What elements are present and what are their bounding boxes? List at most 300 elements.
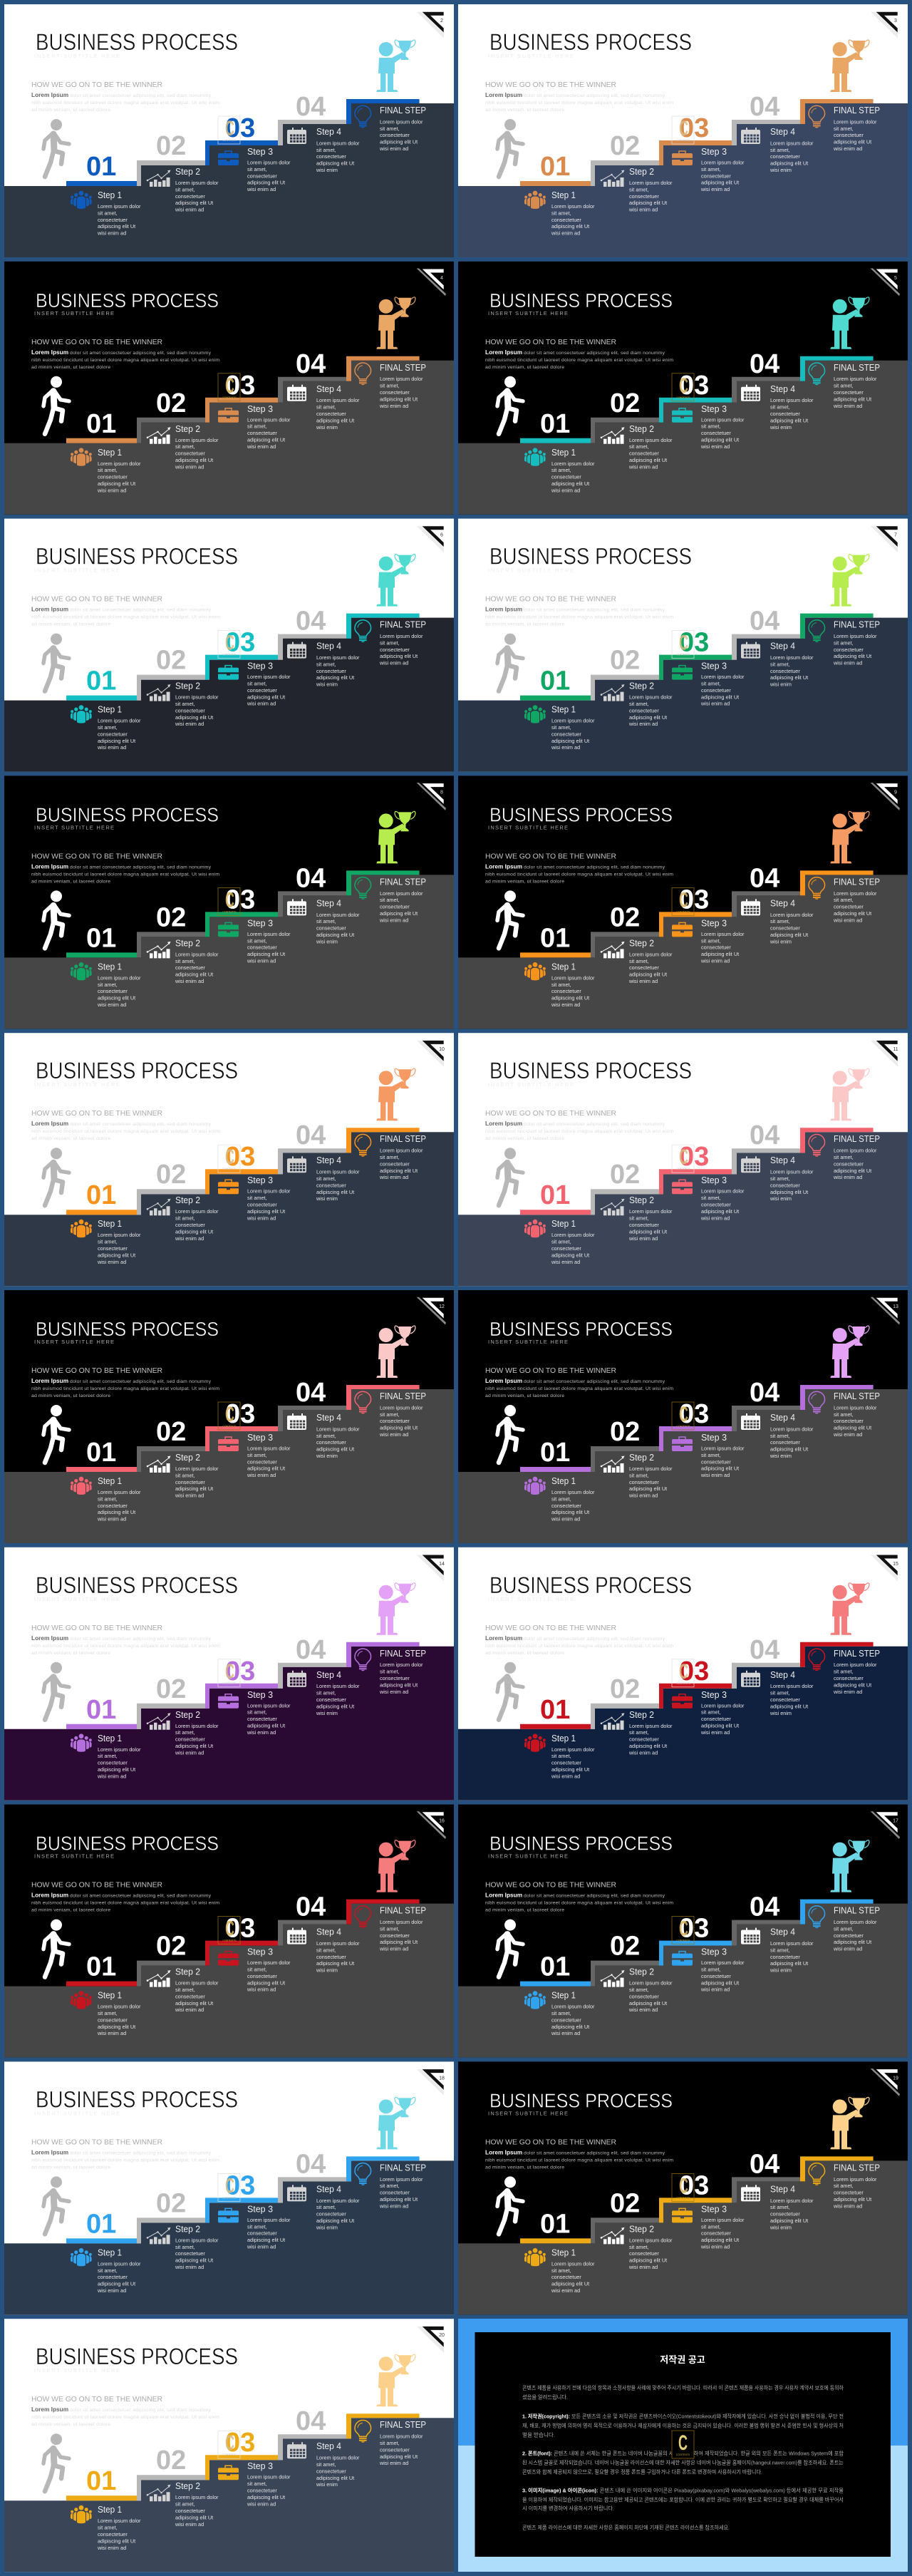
number 04: 04 bbox=[750, 607, 779, 637]
step 1 text: sit amet, bbox=[551, 724, 571, 731]
number 04: 04 bbox=[296, 1378, 326, 1408]
step 3 bbox=[672, 2203, 745, 2250]
step 1 text: consectetuer bbox=[551, 2016, 581, 2023]
final step text: Lorem ipsum dolor bbox=[380, 118, 423, 125]
subtitle: INSERT SUBTITLE HERE bbox=[34, 567, 120, 574]
walking figure bbox=[43, 2433, 69, 2491]
final step text: sit amet, bbox=[380, 1669, 400, 1675]
final step label: FINAL STEP bbox=[380, 1648, 426, 1659]
step 3 text: consectetuer bbox=[247, 1201, 277, 1207]
page number: 3 bbox=[894, 19, 897, 24]
trophy figure bbox=[831, 1840, 869, 1892]
final step bbox=[355, 1133, 426, 1180]
subtitle: INSERT SUBTITLE HERE bbox=[488, 2110, 568, 2116]
step 2 bbox=[147, 2480, 219, 2528]
icon: team bbox=[524, 962, 546, 980]
step 1 label: Step 1 bbox=[551, 1990, 576, 2001]
final step text: wisi enim ad bbox=[833, 2203, 862, 2209]
intro paragraph: Lorem Ipsum bbox=[485, 2148, 522, 2155]
corner wedge bbox=[871, 1297, 900, 1324]
step 4 text: sit amet, bbox=[316, 661, 336, 667]
final step text: consectetuer bbox=[834, 132, 864, 138]
step 1 bbox=[71, 2504, 141, 2551]
trophy figure bbox=[376, 1068, 415, 1120]
step 3 label: Step 3 bbox=[701, 146, 727, 157]
step 2 label: Step 2 bbox=[629, 1452, 654, 1463]
step 3 bbox=[672, 146, 745, 192]
step 3 text: consectetuer bbox=[247, 687, 277, 694]
step 3 text: wisi enim ad bbox=[247, 1472, 276, 1478]
slide 13: purple on black bbox=[458, 1290, 908, 1543]
final step text: Lorem ipsum dolor bbox=[834, 2176, 876, 2183]
heading: HOW WE GO ON TO BE THE WINNER bbox=[31, 339, 162, 346]
icon: chart bbox=[147, 942, 171, 958]
step 4 label: Step 4 bbox=[770, 1412, 795, 1423]
notice intro bbox=[522, 2384, 844, 2401]
step 1 text: adipiscing elit Ut bbox=[98, 480, 135, 487]
step 2 bbox=[601, 166, 673, 213]
intro paragraph: ad minim veniam, ut laoreet dolore bbox=[31, 879, 110, 884]
step 2 text: adipiscing elit Ut bbox=[175, 1485, 213, 1492]
step 3 label: Step 3 bbox=[701, 403, 727, 414]
intro paragraph: dolor sit amet consectetuer adipiscing elit, sed diam nonummy bbox=[524, 93, 665, 98]
notice title: 저작권 공고 bbox=[660, 2354, 705, 2365]
step 4 text: consectetuer bbox=[316, 1182, 346, 1188]
lower stair block bbox=[4, 875, 454, 1029]
intro paragraph bbox=[31, 1634, 219, 1656]
final step text: Lorem ipsum dolor bbox=[834, 890, 876, 897]
step 2 text: adipiscing elit Ut bbox=[175, 2514, 213, 2520]
step 1 text: consectetuer bbox=[551, 1760, 581, 1766]
step 3 text: adipiscing elit Ut bbox=[701, 1208, 739, 1215]
icon: chart bbox=[601, 2227, 624, 2244]
page number: 9 bbox=[894, 790, 897, 795]
title: BUSINESS PROCESS bbox=[36, 289, 219, 311]
step 3 label: Step 3 bbox=[701, 1947, 727, 1957]
step 4 text: Lorem ipsum dolor bbox=[316, 1426, 359, 1432]
step 2 text: wisi enim ad bbox=[628, 207, 658, 213]
step 2 bbox=[147, 1709, 219, 1756]
lower stair block bbox=[4, 103, 454, 257]
step 4 label: Step 4 bbox=[316, 1155, 341, 1165]
corner wedge bbox=[417, 1555, 444, 1581]
step 2 bbox=[601, 1967, 673, 2013]
watermark badge: C bbox=[225, 2174, 234, 2198]
step 3 text: sit amet, bbox=[701, 680, 721, 686]
step 3 text: consectetuer bbox=[701, 430, 731, 436]
step 4 bbox=[287, 1669, 360, 1716]
icon: bulb bbox=[355, 1391, 371, 1414]
step 4 text: consectetuer bbox=[316, 1954, 346, 1960]
final step text: sit amet, bbox=[834, 383, 854, 389]
step 4 text: wisi enim bbox=[770, 938, 792, 944]
grey stair treads bbox=[137, 1148, 346, 1215]
step 4 text: adipiscing elit Ut bbox=[316, 2217, 354, 2224]
intro paragraph: dolor sit amet consectetuer adipiscing elit, sed diam nonummy bbox=[524, 2150, 665, 2155]
intro paragraph bbox=[485, 1892, 673, 1913]
step 3 text: Lorem ipsum dolor bbox=[701, 2217, 744, 2223]
watermark badge bbox=[218, 2431, 240, 2458]
step 2 label: Step 2 bbox=[629, 2223, 654, 2234]
intro paragraph bbox=[31, 349, 219, 370]
step 2 text: Lorem ipsum dolor bbox=[629, 694, 672, 701]
slide background bbox=[458, 2061, 908, 2314]
step 3 text: sit amet, bbox=[247, 1195, 267, 1201]
intro paragraph: dolor sit amet consectetuer adipiscing elit, sed diam nonummy bbox=[70, 93, 212, 98]
slide background bbox=[4, 776, 454, 1029]
step 1 text: consectetuer bbox=[98, 474, 128, 480]
step 1 text: sit amet, bbox=[98, 467, 118, 473]
step 3 text: sit amet, bbox=[701, 1452, 721, 1458]
step 2 text: wisi enim ad bbox=[175, 721, 204, 727]
step 4 bbox=[287, 1412, 360, 1459]
lower stair block bbox=[458, 1647, 908, 1800]
icon: team bbox=[71, 2248, 92, 2266]
final step text: wisi enim ad bbox=[379, 145, 408, 152]
intro paragraph: ad minim veniam, ut laoreet dolore bbox=[31, 1651, 110, 1656]
step 3 text: wisi enim ad bbox=[700, 1215, 730, 1221]
icon: calendar bbox=[287, 642, 306, 659]
intro paragraph: dolor sit amet consectetuer adipiscing elit, sed diam nonummy bbox=[524, 865, 665, 870]
step 2 text: adipiscing elit Ut bbox=[629, 2000, 667, 2006]
step 4 text: sit amet, bbox=[770, 2204, 790, 2210]
title: BUSINESS PROCESS bbox=[36, 2344, 238, 2369]
final step text: consectetuer bbox=[380, 2446, 410, 2453]
watermark badge bbox=[218, 1402, 240, 1430]
step 4 label: Step 4 bbox=[770, 1669, 795, 1680]
step 4 text: Lorem ipsum dolor bbox=[770, 397, 813, 403]
step 2 text: consectetuer bbox=[629, 450, 659, 457]
step 1 label: Step 1 bbox=[98, 1733, 122, 1743]
lower stair block bbox=[458, 1389, 908, 1543]
number 01: 01 bbox=[540, 1695, 570, 1725]
step 3 text: wisi enim ad bbox=[247, 1987, 276, 1993]
step 2 bbox=[601, 1195, 673, 1242]
final step label: FINAL STEP bbox=[380, 1905, 426, 1916]
step 2 text: Lorem ipsum dolor bbox=[175, 1980, 218, 1987]
icon: team bbox=[524, 1220, 546, 1237]
step 4 text: consectetuer bbox=[770, 668, 800, 674]
step 4 text: wisi enim bbox=[316, 1453, 338, 1459]
step 1 text: adipiscing elit Ut bbox=[551, 223, 589, 230]
icon: team bbox=[71, 1477, 92, 1495]
icon: bulb bbox=[355, 877, 371, 900]
icon: bulb bbox=[809, 877, 825, 900]
subtitle: INSERT SUBTITLE HERE bbox=[34, 2367, 120, 2374]
lower stair block bbox=[458, 618, 908, 772]
step 3 bbox=[672, 403, 745, 450]
final step text: adipiscing elit Ut bbox=[834, 396, 871, 402]
slide background bbox=[458, 1805, 908, 2058]
final step label: FINAL STEP bbox=[834, 1133, 880, 1144]
corner mark bbox=[876, 1041, 898, 1061]
corner mark bbox=[423, 269, 444, 289]
final step label: FINAL STEP bbox=[834, 105, 880, 115]
number 01: 01 bbox=[86, 2209, 116, 2239]
step 3 text: consectetuer bbox=[247, 944, 277, 951]
step 1 text: wisi enim ad bbox=[97, 2287, 126, 2294]
step 2 text: adipiscing elit Ut bbox=[629, 714, 667, 721]
step 2 label: Step 2 bbox=[175, 2480, 200, 2491]
final step bbox=[809, 1391, 880, 1438]
number 04: 04 bbox=[296, 1635, 326, 1665]
step 1 label: Step 1 bbox=[98, 1475, 122, 1486]
icon: briefcase bbox=[672, 1694, 693, 1709]
icon: briefcase bbox=[672, 408, 693, 423]
step 1 text: consectetuer bbox=[98, 1245, 128, 1252]
number 02: 02 bbox=[610, 1417, 640, 1447]
corner mark bbox=[423, 783, 444, 804]
grey stair treads bbox=[591, 1920, 800, 1987]
number 04: 04 bbox=[750, 349, 779, 379]
step 4 label: Step 4 bbox=[316, 897, 341, 908]
step 3 text: consectetuer bbox=[701, 1716, 731, 1722]
step 3 label: Step 3 bbox=[701, 661, 727, 671]
watermark badge: CONTENTS bbox=[676, 139, 690, 142]
step 4 bbox=[287, 126, 360, 173]
step 1 bbox=[524, 190, 595, 237]
icon: briefcase bbox=[218, 1694, 239, 1709]
notice footer: 콘텐츠 제품 라이선스에 대한 자세한 사항은 홈페이지 하단에 기재된 콘텐츠 라이선스를 참조하세요. bbox=[522, 2523, 730, 2530]
step 3 text: Lorem ipsum dolor bbox=[247, 931, 290, 937]
step 1 text: Lorem ipsum dolor bbox=[98, 1232, 140, 1238]
icon: team bbox=[524, 1477, 546, 1495]
final step text: Lorem ipsum dolor bbox=[380, 890, 423, 897]
step 3 text: Lorem ipsum dolor bbox=[701, 1702, 744, 1709]
step 2 label: Step 2 bbox=[629, 681, 654, 691]
watermark badge: C bbox=[679, 1403, 688, 1426]
step 3 text: Lorem ipsum dolor bbox=[701, 1188, 744, 1195]
step 2 bbox=[147, 681, 219, 727]
intro paragraph bbox=[485, 606, 673, 627]
step 2 text: sit amet, bbox=[175, 186, 195, 192]
intro paragraph: ad minim veniam, ut laoreet dolore bbox=[31, 2165, 110, 2170]
heading: HOW WE GO ON TO BE THE WINNER bbox=[485, 852, 616, 860]
step 2 label: Step 2 bbox=[629, 423, 654, 434]
step 1 text: Lorem ipsum dolor bbox=[98, 203, 140, 210]
final step text: sit amet, bbox=[834, 639, 854, 646]
step 3 label: Step 3 bbox=[701, 1175, 727, 1185]
step 4 text: adipiscing elit Ut bbox=[770, 417, 808, 423]
step 2 text: sit amet, bbox=[629, 186, 649, 192]
corner wedge bbox=[417, 2327, 444, 2353]
step 4 bbox=[741, 897, 814, 944]
watermark badge: C bbox=[225, 888, 234, 912]
step 3 text: wisi enim ad bbox=[700, 958, 730, 964]
step 1 text: consectetuer bbox=[98, 1503, 128, 1509]
icon: chart bbox=[601, 1713, 624, 1730]
trophy figure bbox=[831, 1583, 869, 1635]
number 02: 02 bbox=[610, 902, 640, 932]
watermark badge: CONTENTS bbox=[222, 139, 237, 142]
intro paragraph: nibh euismod tincidunt ut laoreet dolore magna aliquam erat volutpat. Ut wisi enim bbox=[485, 872, 673, 877]
step 1 text: sit amet, bbox=[551, 1753, 571, 1759]
step 4 text: Lorem ipsum dolor bbox=[316, 2455, 359, 2461]
number 03: 03 bbox=[225, 1142, 255, 1172]
step 2 text: sit amet, bbox=[175, 958, 195, 964]
step 4 text: adipiscing elit Ut bbox=[770, 2217, 808, 2224]
number 04: 04 bbox=[296, 1120, 326, 1150]
step 4 text: wisi enim bbox=[770, 424, 792, 431]
intro paragraph: nibh euismod tincidunt ut laoreet dolore magna aliquam erat volutpat. Ut wisi enim bbox=[31, 1901, 219, 1906]
title: BUSINESS PROCESS bbox=[489, 1572, 692, 1598]
intro paragraph: nibh euismod tincidunt ut laoreet dolore magna aliquam erat volutpat. Ut wisi enim bbox=[31, 1129, 219, 1134]
number 04: 04 bbox=[750, 1892, 779, 1922]
intro paragraph: dolor sit amet consectetuer adipiscing elit, sed diam nonummy bbox=[70, 351, 212, 356]
step 3 text: Lorem ipsum dolor bbox=[247, 2474, 290, 2480]
step 4 text: consectetuer bbox=[770, 1182, 800, 1188]
number 04: 04 bbox=[296, 92, 326, 122]
step 3 text: wisi enim ad bbox=[247, 443, 276, 450]
step 1 label: Step 1 bbox=[98, 704, 122, 715]
final step bbox=[355, 876, 426, 923]
title: BUSINESS PROCESS bbox=[36, 544, 238, 570]
slide background bbox=[4, 1805, 454, 2058]
watermark badge bbox=[218, 373, 240, 401]
step 4 bbox=[287, 2183, 360, 2230]
final step text: adipiscing elit Ut bbox=[380, 1939, 418, 1945]
accent stair treads bbox=[66, 1642, 420, 1729]
lower stair block bbox=[458, 2160, 908, 2314]
lower stair block bbox=[4, 1389, 454, 1543]
step 2 label: Step 2 bbox=[175, 2223, 200, 2234]
final step bbox=[809, 1905, 880, 1952]
step 1 bbox=[71, 1733, 141, 1779]
final step text: consectetuer bbox=[380, 1675, 410, 1681]
number 02: 02 bbox=[156, 1160, 186, 1190]
step 2 text: Lorem ipsum dolor bbox=[175, 2237, 218, 2243]
number 01: 01 bbox=[540, 152, 570, 182]
slide 15: red on white bbox=[458, 1547, 908, 1800]
step 1 text: sit amet, bbox=[98, 982, 118, 988]
step 4 text: adipiscing elit Ut bbox=[316, 1960, 354, 1967]
step 1 text: wisi enim ad bbox=[551, 230, 580, 237]
intro paragraph: Lorem Ipsum bbox=[31, 1634, 68, 1642]
icon: team bbox=[524, 2248, 546, 2266]
step 4 text: sit amet, bbox=[770, 147, 790, 153]
step 3 text: sit amet, bbox=[247, 423, 267, 430]
step 3 text: sit amet, bbox=[701, 423, 721, 430]
step 4 text: consectetuer bbox=[770, 925, 800, 932]
final step text: consectetuer bbox=[380, 646, 410, 653]
step 4 text: sit amet, bbox=[316, 1433, 336, 1439]
watermark badge bbox=[672, 1659, 694, 1687]
intro paragraph: ad minim veniam, ut laoreet dolore bbox=[485, 108, 564, 113]
step 1 bbox=[71, 1475, 141, 1523]
intro paragraph: nibh euismod tincidunt ut laoreet dolore magna aliquam erat volutpat. Ut wisi enim bbox=[31, 2158, 219, 2163]
intro paragraph: nibh euismod tincidunt ut laoreet dolore magna aliquam erat volutpat. Ut wisi enim bbox=[485, 101, 673, 105]
step 3 text: Lorem ipsum dolor bbox=[247, 1702, 290, 1709]
icon: briefcase bbox=[672, 1952, 693, 1966]
step 3 bbox=[218, 403, 291, 450]
step 3 text: wisi enim ad bbox=[247, 701, 276, 707]
final step bbox=[355, 2419, 426, 2466]
step 1 text: Lorem ipsum dolor bbox=[551, 203, 594, 210]
icon: calendar bbox=[741, 642, 760, 659]
step 4 label: Step 4 bbox=[316, 641, 341, 651]
step 3 text: wisi enim ad bbox=[700, 443, 730, 450]
watermark badge bbox=[672, 1917, 694, 1944]
number 01: 01 bbox=[540, 666, 570, 696]
step 1 text: Lorem ipsum dolor bbox=[551, 974, 594, 981]
intro paragraph: nibh euismod tincidunt ut laoreet dolore magna aliquam erat volutpat. Ut wisi enim bbox=[31, 358, 219, 363]
step 2 text: sit amet, bbox=[629, 958, 649, 964]
final step text: Lorem ipsum dolor bbox=[380, 376, 423, 382]
corner mark bbox=[423, 12, 444, 33]
icon: team bbox=[71, 1733, 92, 1752]
final step text: consectetuer bbox=[380, 2190, 410, 2196]
icon: bulb bbox=[355, 1649, 371, 1671]
heading: HOW WE GO ON TO BE THE WINNER bbox=[485, 81, 616, 89]
step 4 bbox=[741, 1155, 814, 1202]
step 2 text: wisi enim ad bbox=[175, 2006, 204, 2013]
step 2 label: Step 2 bbox=[629, 166, 654, 177]
step 4 text: Lorem ipsum dolor bbox=[770, 912, 813, 918]
step 1 label: Step 1 bbox=[551, 2247, 576, 2257]
watermark badge bbox=[218, 116, 240, 144]
step 4 label: Step 4 bbox=[770, 1927, 795, 1937]
icon: team bbox=[71, 448, 92, 466]
step 2 bbox=[601, 423, 673, 470]
step 3 text: wisi enim ad bbox=[247, 958, 276, 964]
number 01: 01 bbox=[86, 1180, 116, 1210]
final step text: consectetuer bbox=[834, 1160, 864, 1167]
intro paragraph: ad minim veniam, ut laoreet dolore bbox=[485, 1393, 564, 1398]
step 1 text: wisi enim ad bbox=[551, 1516, 580, 1523]
slide 11: pink on white bbox=[458, 1033, 908, 1286]
step 4 text: consectetuer bbox=[770, 1696, 800, 1703]
step 2 text: adipiscing elit Ut bbox=[175, 457, 213, 463]
step 1 text: consectetuer bbox=[551, 731, 581, 737]
step 4 text: Lorem ipsum dolor bbox=[316, 654, 359, 661]
lower stair block bbox=[4, 2418, 454, 2572]
page number: 6 bbox=[440, 533, 443, 538]
step 4 text: sit amet, bbox=[316, 1175, 336, 1182]
slide 12: pink on black bbox=[4, 1290, 454, 1543]
number 02: 02 bbox=[610, 131, 640, 161]
grey stair treads bbox=[591, 1663, 800, 1729]
step 4 text: adipiscing elit Ut bbox=[316, 160, 354, 167]
number 01: 01 bbox=[540, 1952, 570, 1982]
intro paragraph: dolor sit amet consectetuer adipiscing elit, sed diam nonummy bbox=[524, 608, 665, 613]
watermark badge: C bbox=[679, 1660, 688, 1684]
final step text: wisi enim ad bbox=[379, 403, 408, 409]
final step text: Lorem ipsum dolor bbox=[380, 633, 423, 639]
accent stair treads bbox=[66, 614, 420, 701]
step 2 text: adipiscing elit Ut bbox=[629, 1485, 667, 1492]
icon: bulb bbox=[355, 105, 371, 128]
step 2 text: Lorem ipsum dolor bbox=[175, 437, 218, 443]
corner wedge bbox=[417, 12, 444, 38]
step 2 text: sit amet, bbox=[175, 2501, 195, 2508]
step 4 text: consectetuer bbox=[316, 2211, 346, 2217]
step 2 text: Lorem ipsum dolor bbox=[175, 1723, 218, 1729]
step 1 text: consectetuer bbox=[98, 2531, 128, 2538]
step 4 text: sit amet, bbox=[770, 1175, 790, 1182]
step 1 label: Step 1 bbox=[98, 1990, 122, 2001]
step 4 text: consectetuer bbox=[316, 1439, 346, 1446]
icon: briefcase bbox=[218, 151, 239, 165]
step 1 label: Step 1 bbox=[98, 2504, 122, 2515]
icon: bulb bbox=[809, 2163, 825, 2185]
accent stair treads bbox=[520, 1900, 874, 1987]
step 4 text: sit amet, bbox=[770, 404, 790, 411]
accent stair treads bbox=[66, 1128, 420, 1215]
step 3 text: consectetuer bbox=[701, 944, 731, 951]
step 4 text: sit amet, bbox=[770, 1690, 790, 1696]
step 2 text: consectetuer bbox=[175, 1479, 205, 1485]
heading: HOW WE GO ON TO BE THE WINNER bbox=[485, 2138, 616, 2146]
